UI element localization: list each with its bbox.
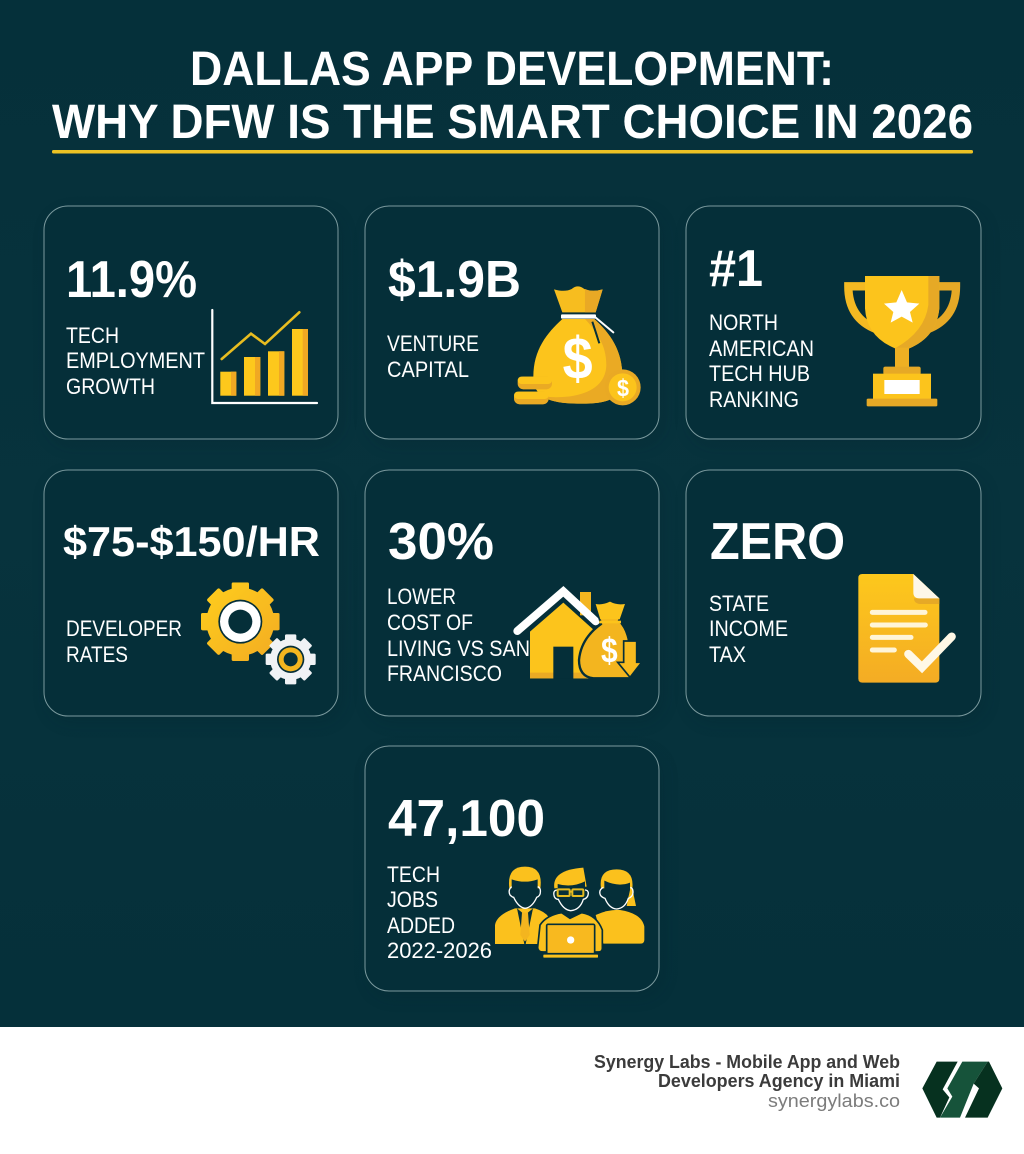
label: lower cost of living vs san francisco: LOWER <box>387 584 456 609</box>
footer text: agency name and site: Synergy Labs - Mobile App and Web <box>594 1052 900 1072</box>
label: state income tax: TAX <box>709 642 746 667</box>
label: state income tax: INCOME <box>709 616 788 641</box>
label: lower cost of living vs san francisco: FRANCISCO <box>387 661 502 686</box>
icon: money bag: $ <box>563 324 593 391</box>
label: north american tech hub ranking: RANKING <box>709 387 799 412</box>
title: DALLAS APP DEVELOPMENT: <box>190 43 834 96</box>
panel: tech employment growth <box>44 206 342 445</box>
stat: $1.9B: $1.9B <box>388 251 521 309</box>
footer band <box>0 1027 1024 1154</box>
icon: tax document with check <box>858 574 952 683</box>
label: north american tech hub ranking: NORTH <box>709 310 778 335</box>
stat: 30%: 30% <box>388 513 494 571</box>
label: tech jobs added 2022-2026: 2022-2026 <box>387 938 492 963</box>
label: developer rates: RATES <box>66 642 128 667</box>
icon: money bag: $ <box>617 375 629 402</box>
icon: house and money bag: $ <box>601 632 618 671</box>
icon: house and money bag <box>517 591 642 679</box>
title <box>52 43 973 154</box>
panel: tech jobs added <box>365 746 663 997</box>
panel: state income tax <box>686 470 985 722</box>
label: north american tech hub ranking: TECH HUB <box>709 361 810 386</box>
title: WHY DFW IS THE SMART CHOICE IN 2026 <box>52 96 973 149</box>
stat: $75-$150/HR: $75-$150/HR <box>63 518 320 565</box>
panel: lower cost of living <box>365 470 663 722</box>
icon: bar chart <box>212 310 317 403</box>
footer text: agency name and site: synergylabs.co <box>768 1090 900 1111</box>
stat: 11.9%: 11.9% <box>66 251 197 309</box>
label: lower cost of living vs san francisco: COST OF <box>387 610 473 635</box>
label: venture capital <box>387 331 479 382</box>
label: tech employment growth: TECH <box>66 323 119 348</box>
label: developer rates <box>66 616 182 667</box>
footer text: agency name and site: Developers Agency in Miami <box>658 1071 900 1091</box>
panel: developer rates <box>44 470 342 722</box>
label: tech jobs added 2022-2026 <box>387 862 492 963</box>
label: venture capital: VENTURE <box>387 331 479 356</box>
label: tech jobs added 2022-2026: ADDED <box>387 913 455 938</box>
panel: venture capital <box>365 206 663 445</box>
stat: 47,100: 47,100 <box>388 790 545 848</box>
label: venture capital: CAPITAL <box>387 357 469 382</box>
label: state income tax: STATE <box>709 591 769 616</box>
icon: gears <box>200 582 316 684</box>
label: tech employment growth: GROWTH <box>66 374 155 399</box>
logo: synergy labs hexagon <box>922 1062 1002 1118</box>
label: developer rates: DEVELOPER <box>66 616 182 641</box>
stat: ZERO: ZERO <box>710 513 845 571</box>
icon: trophy <box>848 276 956 406</box>
footer text: agency name and site <box>594 1052 900 1111</box>
label: lower cost of living vs san francisco <box>387 584 530 686</box>
icon: three tech workers <box>495 867 644 958</box>
icon: money bag <box>514 286 641 405</box>
label: tech jobs added 2022-2026: JOBS <box>387 887 438 912</box>
label: tech employment growth: EMPLOYMENT <box>66 348 205 373</box>
label: tech employment growth <box>66 323 205 399</box>
label: state income tax <box>709 591 788 667</box>
label: lower cost of living vs san francisco: LIVING VS SAN <box>387 636 530 661</box>
stat: #1: #1 <box>709 240 763 298</box>
label: north american tech hub ranking: AMERICAN <box>709 336 814 361</box>
label: north american tech hub ranking <box>709 310 814 412</box>
label: tech jobs added 2022-2026: TECH <box>387 862 440 887</box>
panel: tech hub ranking <box>686 206 985 445</box>
